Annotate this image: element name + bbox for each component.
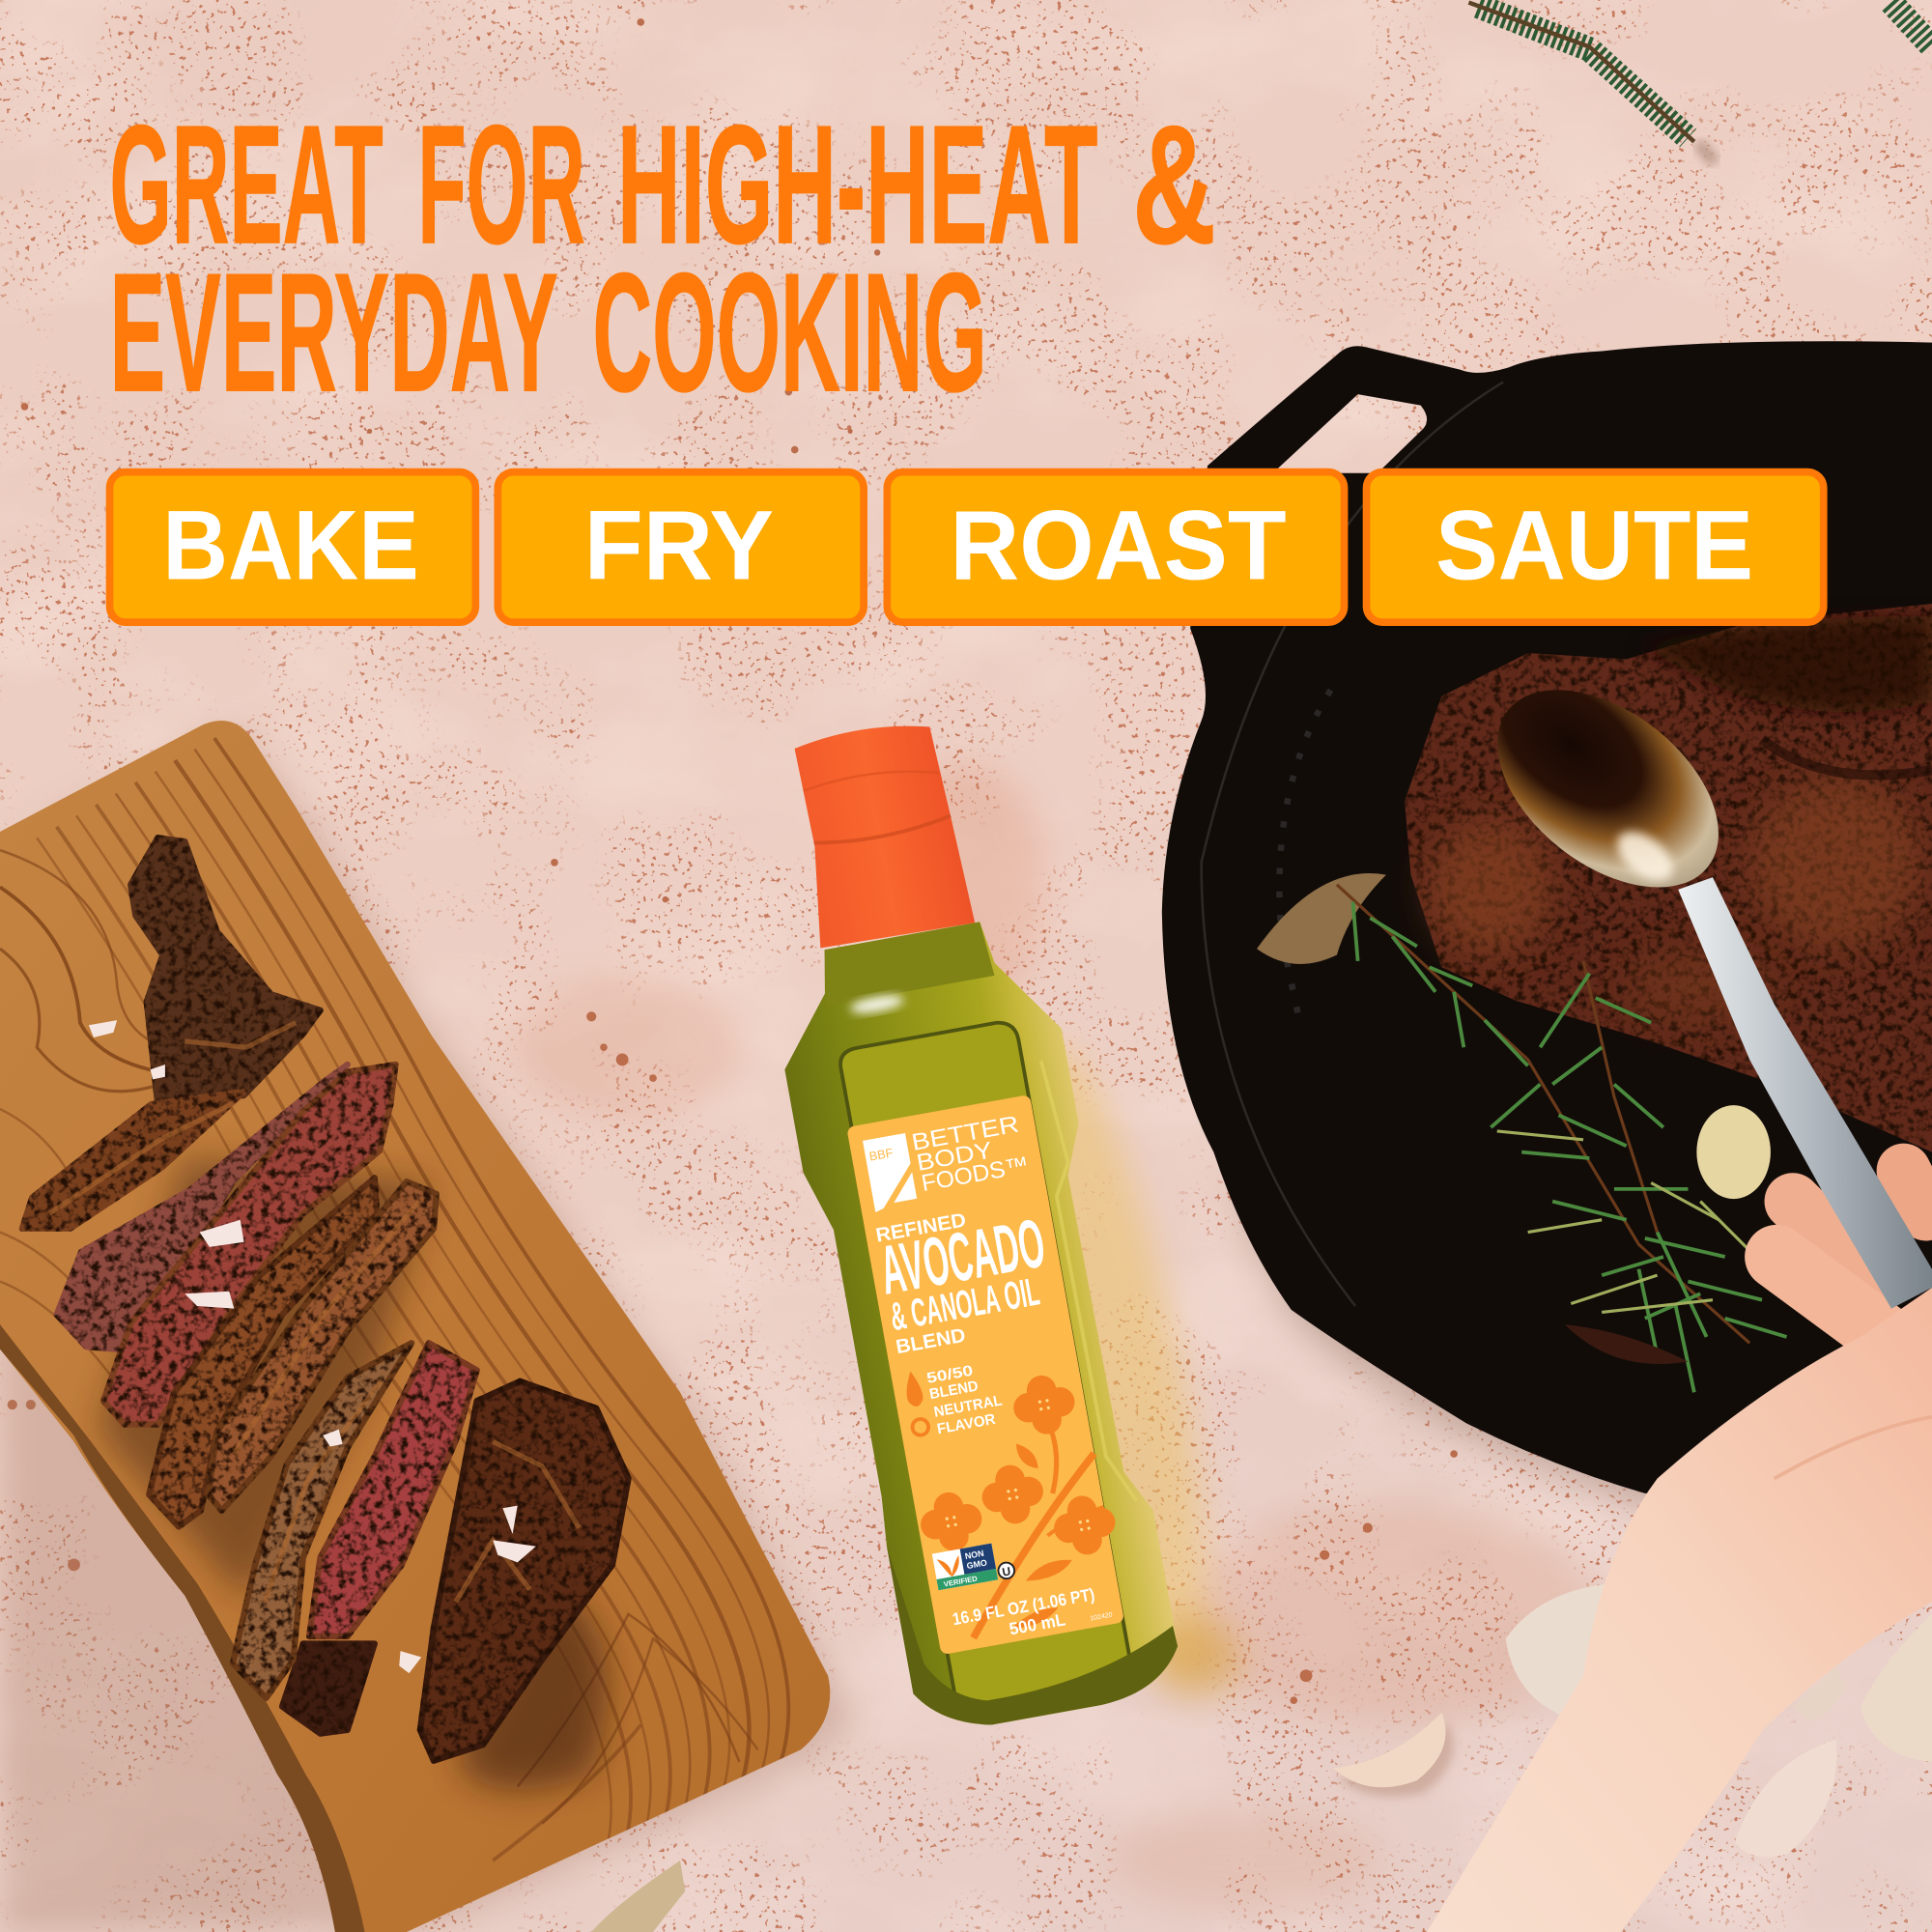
rosemary needles xyxy=(1353,902,1786,1392)
icon: neutral flavor ring xyxy=(911,1418,929,1436)
steak in skillet xyxy=(1405,604,1932,1152)
cutting board with steak xyxy=(0,721,850,1932)
crust highlights xyxy=(49,1023,579,1602)
board surface xyxy=(0,721,830,1932)
non-gmo badge: GMO xyxy=(966,1557,988,1571)
product label: U xyxy=(1001,1564,1011,1579)
rust spots xyxy=(8,18,1458,1704)
net volume: 16.9 FL OZ (1.06 PT) xyxy=(951,1584,1096,1629)
orange cap xyxy=(783,716,975,951)
product label: 50/50 xyxy=(925,1363,975,1387)
title: & xyxy=(1132,91,1216,279)
bottle xyxy=(728,703,1185,1741)
title: HIGH-HEAT xyxy=(617,91,1097,279)
product label: AVOCADO xyxy=(874,1205,1051,1310)
kosher mark xyxy=(997,1561,1015,1580)
non-gmo badge: VERIFIED xyxy=(943,1574,979,1589)
title: COOKING xyxy=(593,239,987,427)
floral illustration xyxy=(898,1367,1131,1643)
fingers xyxy=(1776,1171,1926,1337)
arm and palm xyxy=(1427,1288,1932,1932)
garlic clove: browned xyxy=(1257,873,1386,964)
rosemary sprig: top right xyxy=(1468,3,1932,162)
product label: BLEND xyxy=(895,1325,967,1358)
rosemary and garlic in skillet xyxy=(1257,873,1786,1392)
non-gmo badge xyxy=(932,1544,998,1590)
product name: REFINED xyxy=(874,1209,968,1247)
title: EVERYDAY xyxy=(110,239,558,427)
cooking method buttons xyxy=(110,472,1824,622)
product label: BLEND xyxy=(928,1378,980,1403)
spoon bowl xyxy=(1461,650,1755,927)
garlic clove: pale xyxy=(1696,1105,1771,1199)
rope handle xyxy=(591,1861,685,1932)
product label: & CANOLA OIL xyxy=(887,1268,1042,1339)
product label: 102420 xyxy=(1090,1612,1113,1623)
brand name: BETTER xyxy=(910,1111,1021,1156)
glass body xyxy=(765,910,1185,1741)
hand holding spoon xyxy=(1427,650,1932,1932)
steak slices xyxy=(22,838,629,1761)
cast iron skillet xyxy=(1162,341,1932,1506)
button: fry xyxy=(497,472,864,622)
product label: FOODS™ xyxy=(920,1152,1031,1197)
title: FOR xyxy=(417,91,585,279)
button: saute xyxy=(1367,472,1824,622)
product label: NEUTRAL xyxy=(932,1392,1004,1421)
product label: BODY xyxy=(915,1137,994,1177)
salt flakes xyxy=(89,1020,536,1673)
product label xyxy=(846,1093,1133,1655)
highlight xyxy=(849,992,905,1016)
wood grain xyxy=(0,738,788,1861)
button: bake xyxy=(110,472,475,622)
spoon handle xyxy=(1678,877,1932,1309)
button: bake: BAKE xyxy=(162,490,419,600)
button: saute: SAUTE xyxy=(1435,490,1753,600)
button: roast: ROAST xyxy=(950,490,1287,600)
title: GREAT xyxy=(110,91,384,279)
logo flag xyxy=(863,1133,918,1212)
bottle shadow and glow xyxy=(875,764,1242,1696)
product label: FLAVOR xyxy=(936,1411,997,1437)
non-gmo badge: NON xyxy=(964,1548,984,1561)
product label: BBF xyxy=(868,1145,895,1164)
bark edge xyxy=(0,1324,365,1932)
button: roast xyxy=(887,472,1345,622)
icon: avocado drop xyxy=(902,1370,924,1407)
title xyxy=(110,91,1216,427)
garlic cloves on counter xyxy=(1333,1583,1932,1857)
button: fry: FRY xyxy=(584,490,774,600)
product label: 500 mL xyxy=(1008,1609,1067,1638)
